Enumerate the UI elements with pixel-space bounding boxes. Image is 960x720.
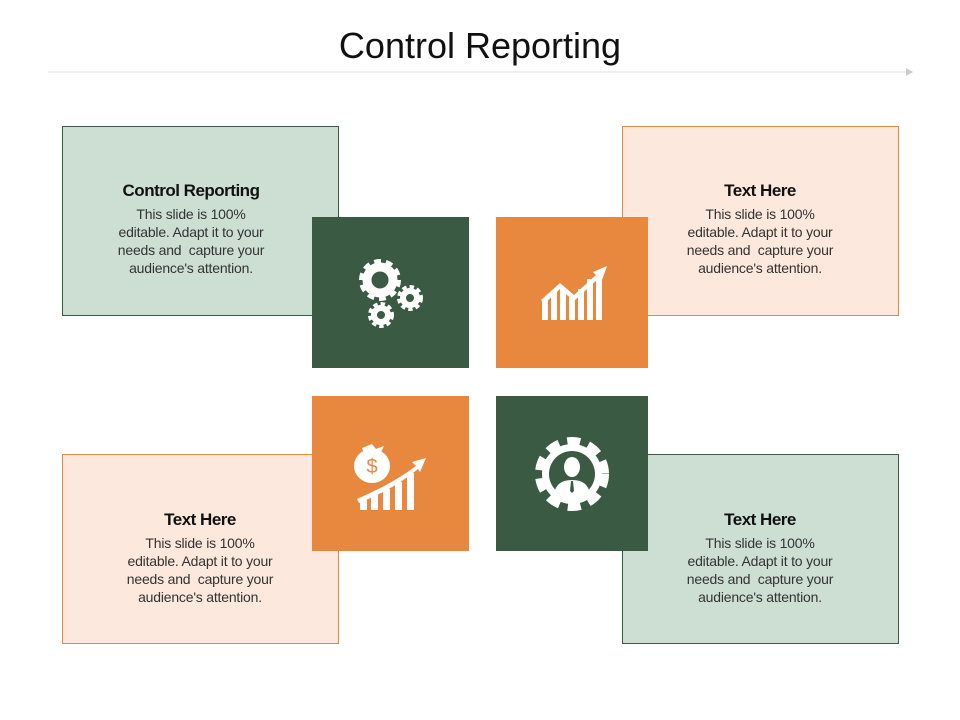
text: bottom-left: Text Here [164,510,236,529]
panel: top-right [622,126,899,316]
title underline arrow [48,68,913,76]
panel: top-left [62,126,339,316]
icon: bar chart arrow [541,266,607,320]
text: bottom-right: Text Here [724,510,796,529]
text: top-right: needs and capture your [687,242,833,258]
text: top-right: editable. Adapt it to your [687,224,832,240]
text: top-left: Control Reporting [123,181,259,200]
text: bottom-left [127,510,274,605]
text: top-left: needs and capture your [118,242,264,258]
square: gear person [496,396,648,551]
icon: gears [359,259,423,328]
text: bottom-left: audience's attention. [138,589,262,605]
panel: bottom-right [622,454,899,644]
text: bottom-left: needs and capture your [127,571,273,587]
square: money growth [312,396,469,551]
text: bottom-left: editable. Adapt it to your [127,553,272,569]
square: growth chart [496,217,648,368]
icon: money bag and chart [354,444,426,510]
icon: gear with person [535,437,609,511]
text: bottom-right [687,510,834,605]
title: Control Reporting [339,25,621,66]
text: bottom-right: needs and capture your [687,571,833,587]
text: top-left: This slide is 100% [136,206,246,222]
panel: bottom-left [62,454,339,644]
text: bottom-left: This slide is 100% [145,535,255,551]
text: top-right [687,181,834,276]
text: top-left [118,181,264,276]
text: top-right: Text Here [724,181,796,200]
text: top-right: audience's attention. [698,260,822,276]
text: top-right: This slide is 100% [705,206,815,222]
text: bottom-right: This slide is 100% [705,535,815,551]
icon: money bag and chart: $ [366,456,378,478]
text: bottom-right: audience's attention. [698,589,822,605]
text: top-left: audience's attention. [129,260,253,276]
text: bottom-right: editable. Adapt it to your [687,553,832,569]
text: top-left: editable. Adapt it to your [118,224,264,240]
square: gears [312,217,469,368]
